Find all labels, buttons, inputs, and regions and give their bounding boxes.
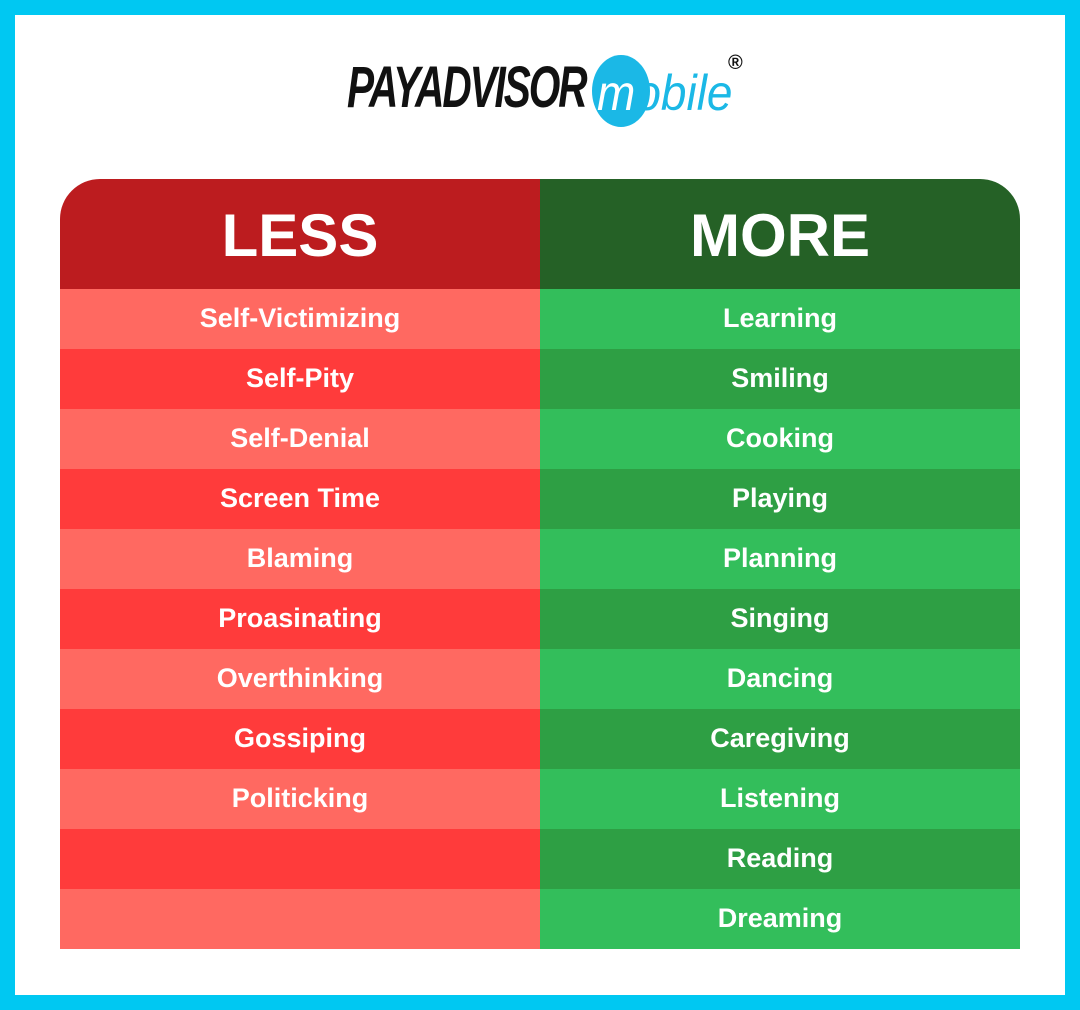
column: less: Gossiping [234, 723, 366, 753]
column: more: Caregiving [710, 723, 850, 753]
logo [347, 52, 743, 127]
column: less: Blaming [247, 543, 353, 573]
column: less: Self-Denial [230, 423, 370, 453]
column: more: Reading [727, 843, 833, 873]
column: more: Learning [723, 303, 837, 333]
column: less [60, 179, 540, 949]
heading: LESS [60, 179, 540, 289]
column: less: Politicking [232, 783, 368, 813]
comparison table [60, 179, 1020, 949]
column: less: Self-Victimizing [200, 303, 400, 333]
logo circle [592, 55, 650, 127]
column: more: Planning [723, 543, 837, 573]
column: more: Dancing [727, 663, 833, 693]
heading: MORE: MORE [690, 202, 870, 269]
column: more: Cooking [726, 423, 834, 453]
column: more: Dreaming [718, 903, 842, 933]
column: more: Listening [720, 783, 840, 813]
column: less: Screen Time [220, 483, 380, 513]
column: less: Proasinating [218, 603, 382, 633]
column: more [540, 179, 1020, 949]
column: less: Self-Pity [246, 363, 354, 393]
column: more: Playing [732, 483, 828, 513]
logo text: PayAdvisor: PAYADVISOR [347, 55, 585, 120]
column: more: Smiling [731, 363, 829, 393]
heading: LESS: LESS [222, 202, 378, 269]
registered mark: ® [728, 52, 743, 74]
column: more: Singing [730, 603, 829, 633]
column: less: Overthinking [217, 663, 383, 693]
logo text: mobile: mobile [597, 65, 733, 121]
heading: MORE [540, 179, 1020, 289]
